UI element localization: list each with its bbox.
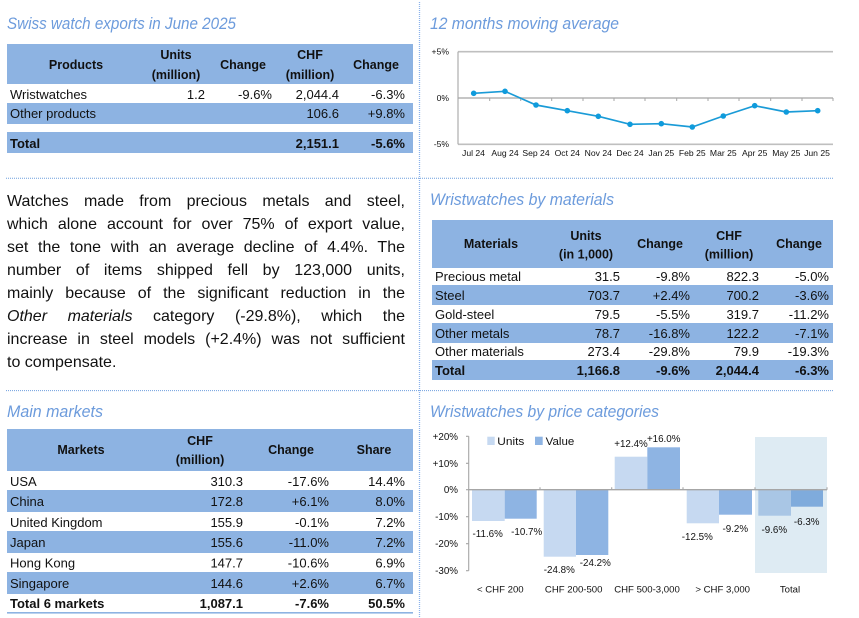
row: Total 6 markets: -7.6%: [295, 596, 329, 611]
group: CHF 200-500: -24.2%: [580, 558, 611, 569]
table header row: Change: [268, 443, 314, 457]
row: China: 8.0%: [375, 494, 405, 509]
row: Precious metal: Precious metal: [435, 269, 521, 284]
table header row: [7, 429, 413, 471]
table header row: Change: [353, 58, 399, 72]
row: Hong Kong: Hong Kong: [10, 556, 75, 570]
x axis labels: [462, 148, 830, 158]
row: Hong Kong: 6.9%: [375, 556, 405, 570]
table header row: Units: [160, 48, 192, 62]
total highlight band: [755, 437, 827, 573]
row: Total: 1,166.8: [577, 363, 620, 378]
x axis labels: Apr 25: [742, 148, 768, 158]
row: Gold-steel: -5.5%: [656, 307, 690, 322]
group: over CHF 3,000: -12.5%: [682, 532, 713, 543]
row: Singapore: 144.6: [210, 576, 243, 591]
category labels: CHF 500-3,000: [614, 584, 680, 596]
row: Wristwatches: 2,044.4: [296, 87, 339, 102]
row: Wristwatches: -6.3%: [371, 87, 405, 102]
row: Other metals: 122.2: [726, 326, 759, 341]
text block: commentary paragraph: to compensate.: [7, 354, 116, 371]
axes: [466, 436, 827, 571]
row: Japan: Japan: [10, 535, 45, 550]
row: Precious metal: [435, 269, 829, 284]
x axis labels: Jun 25: [804, 148, 830, 158]
row: Hong Kong: 147.7: [210, 556, 243, 570]
row: Precious metal: 822.3: [726, 269, 759, 284]
row: Other materials: 273.4: [587, 344, 620, 359]
y axis labels: +5%: [432, 46, 449, 56]
row: Precious metal: -9.8%: [656, 269, 690, 284]
row: Hong Kong: [10, 556, 405, 570]
table header row: CHF: [716, 229, 742, 243]
row: USA: 14.4%: [368, 474, 405, 489]
group: over CHF 3,000: [682, 490, 752, 543]
y axis labels: +20%: [433, 432, 458, 443]
category labels: [477, 584, 800, 596]
group: CHF 500-3,000: [614, 434, 681, 490]
text block: commentary paragraph: which alone account for over 75% of export value,: [7, 216, 405, 233]
table header row: (million): [176, 453, 224, 467]
row: Other products: Other products: [10, 106, 96, 121]
x axis labels: Mar 25: [710, 148, 737, 158]
text block: commentary paragraph: set the tone with an average decline of 4.4%. The: [7, 239, 405, 256]
table header row: (in 1,000): [559, 248, 613, 262]
y axis labels: 0%: [437, 93, 449, 103]
table header row: Units: [570, 229, 602, 243]
table header row: Products: [49, 58, 103, 72]
row: Gold-steel: 319.7: [726, 307, 759, 322]
category labels: < CHF 200: [477, 584, 524, 596]
group: CHF 200-500: -24.8%: [544, 565, 575, 576]
text block: commentary paragraph: increase in steel models (+2.4%) was not sufficient: [7, 331, 405, 348]
y axis labels: -10%: [435, 512, 458, 523]
row: Other materials: -19.3%: [788, 344, 829, 359]
table header row: [432, 220, 833, 268]
row: Japan: [7, 531, 413, 553]
title: Swiss watch exports in June 2025: Swiss watch exports in June 2025: [7, 15, 237, 33]
row: Precious metal: 31.5: [595, 269, 620, 284]
table header row: Change: [220, 58, 266, 72]
row: China: China: [10, 494, 45, 509]
table header row: CHF: [297, 48, 323, 62]
y axis labels: [433, 432, 458, 577]
row: Total: -9.6%: [656, 363, 690, 378]
group: Total: -6.3%: [794, 517, 820, 528]
row: Other metals: [432, 323, 833, 343]
row: United Kingdom: [10, 515, 405, 530]
row: Gold-steel: [435, 307, 829, 322]
row: Japan: 155.6: [210, 535, 243, 550]
row: Total: -6.3%: [795, 363, 829, 378]
table header row: CHF: [187, 434, 213, 448]
text block: commentary paragraph: mainly because of the significant reduction in the: [7, 285, 405, 302]
row: USA: USA: [10, 474, 37, 489]
group: under CHF 200: [472, 490, 543, 540]
table header row: (million): [152, 68, 200, 82]
row: United Kingdom: -0.1%: [295, 515, 329, 530]
x axis labels: Dec 24: [616, 148, 644, 158]
row: Other materials: 79.9: [734, 344, 759, 359]
row: Singapore: Singapore: [10, 576, 69, 591]
group: over CHF 3,000: -9.2%: [723, 524, 748, 535]
row: Singapore: [7, 572, 413, 594]
row: Total: -5.6%: [371, 136, 405, 151]
row: Total 6 markets: 1,087.1: [200, 596, 243, 611]
group: CHF 500-3,000: +12.4%: [614, 439, 648, 450]
row: Wristwatches: 1.2: [187, 87, 205, 102]
line chart: 12 months moving average: [432, 46, 833, 158]
group: Total: [758, 490, 823, 536]
row: Steel: -3.6%: [795, 288, 829, 303]
title: Wristwatches by materials: Wristwatches by materials: [430, 191, 614, 209]
row: Japan: -11.0%: [289, 535, 329, 550]
row: Other materials: [435, 344, 829, 359]
row: Steel: Steel: [435, 288, 465, 303]
text block: commentary paragraph: Other materials category (-29.8%), which the: [7, 308, 405, 325]
y axis labels: -5%: [434, 139, 449, 149]
group: CHF 500-3,000: +16.0%: [647, 434, 681, 445]
data line: [471, 88, 820, 130]
x axis labels: Nov 24: [585, 148, 612, 158]
row: Hong Kong: -10.6%: [288, 556, 329, 570]
table header row: Markets: [57, 443, 105, 457]
row: Steel: 703.7: [587, 288, 620, 303]
row: USA: -17.6%: [288, 474, 329, 489]
row: Other metals: Other metals: [435, 326, 510, 341]
row: Other products: [7, 103, 413, 124]
row: Singapore: +2.6%: [292, 576, 329, 591]
row: Wristwatches: -9.6%: [238, 87, 272, 102]
row: Total: Total: [10, 136, 40, 151]
group: CHF 200-500: [544, 490, 611, 576]
row: Total: Total: [435, 363, 465, 378]
table: products: [7, 44, 413, 153]
title: Main markets: Main markets: [7, 403, 103, 421]
row: Total: 2,151.1: [296, 136, 339, 151]
row: China: +6.1%: [292, 494, 329, 509]
legend: [487, 436, 574, 448]
row: Total 6 markets: [7, 596, 413, 614]
row: Wristwatches: [10, 87, 405, 102]
row: Total 6 markets: 50.5%: [368, 596, 405, 611]
legend: Value: [546, 436, 574, 448]
y axis labels: [432, 46, 449, 149]
row: Gold-steel: Gold-steel: [435, 307, 494, 322]
title: 12 months moving average: 12 months moving average: [430, 15, 619, 33]
table header row: Change: [776, 237, 822, 251]
bar chart: price categories: [433, 432, 827, 596]
row: Total: [432, 360, 833, 380]
x axis labels: Aug 24: [491, 148, 519, 158]
row: USA: 310.3: [210, 474, 243, 489]
row: USA: [10, 474, 405, 489]
row: Total: 2,044.4: [716, 363, 760, 378]
group: Total: -9.6%: [762, 525, 787, 536]
text block: commentary paragraph: number of items shipped fell by 123,000 units,: [7, 262, 405, 279]
table: materials: [432, 220, 833, 380]
row: Other products: +9.8%: [368, 106, 405, 121]
row: Steel: [432, 285, 833, 305]
row: Gold-steel: 79.5: [595, 307, 620, 322]
group: under CHF 200: -10.7%: [511, 527, 543, 538]
category labels: > CHF 3,000: [695, 584, 750, 596]
group: under CHF 200: -11.6%: [473, 529, 503, 540]
y axis labels: -30%: [435, 566, 458, 577]
row: United Kingdom: 155.9: [210, 515, 243, 530]
row: Other materials: Other materials: [435, 344, 524, 359]
x axis labels: Oct 24: [555, 148, 580, 158]
table: main markets: [7, 429, 413, 614]
text block: commentary paragraph: [7, 193, 405, 371]
row: Other metals: 78.7: [595, 326, 620, 341]
table header row: Share: [357, 443, 391, 457]
row: Other products: 106.6: [306, 106, 339, 121]
y axis labels: +10%: [433, 459, 458, 470]
legend: Units: [497, 436, 525, 448]
table header row: (million): [705, 248, 753, 262]
y axis labels: 0%: [444, 485, 458, 496]
row: Steel: 700.2: [726, 288, 759, 303]
table header row: Materials: [464, 237, 518, 251]
row: Total: [7, 132, 413, 153]
row: Other metals: -16.8%: [649, 326, 690, 341]
row: United Kingdom: 7.2%: [375, 515, 405, 530]
row: Japan: 7.2%: [375, 535, 405, 550]
row: Precious metal: -5.0%: [795, 269, 829, 284]
x axis labels: Jul 24: [462, 148, 485, 158]
category labels: CHF 200-500: [545, 584, 602, 596]
row: Other materials: -29.8%: [649, 344, 690, 359]
text block: commentary paragraph: Watches made from precious metals and steel,: [7, 193, 405, 210]
table header row: [7, 44, 413, 84]
table header row: (million): [286, 68, 334, 82]
row: Total 6 markets: Total 6 markets: [10, 596, 104, 611]
row: Wristwatches: Wristwatches: [10, 87, 88, 102]
y axis labels: -20%: [435, 539, 458, 550]
row: China: 172.8: [210, 494, 243, 509]
x axis labels: May 25: [772, 148, 801, 158]
row: China: [7, 490, 413, 512]
row: Singapore: 6.7%: [375, 576, 405, 591]
row: United Kingdom: United Kingdom: [10, 515, 102, 530]
row: Gold-steel: -11.2%: [789, 307, 829, 322]
x axis labels: Feb 25: [679, 148, 706, 158]
row: Other metals: -7.1%: [795, 326, 829, 341]
row: Steel: +2.4%: [653, 288, 690, 303]
x axis labels: Sep 24: [522, 148, 550, 158]
category labels: Total: [780, 584, 800, 596]
table header row: Change: [637, 237, 683, 251]
x axis labels: Jan 25: [648, 148, 674, 158]
title: Wristwatches by price categories: Wristwatches by price categories: [430, 403, 659, 421]
